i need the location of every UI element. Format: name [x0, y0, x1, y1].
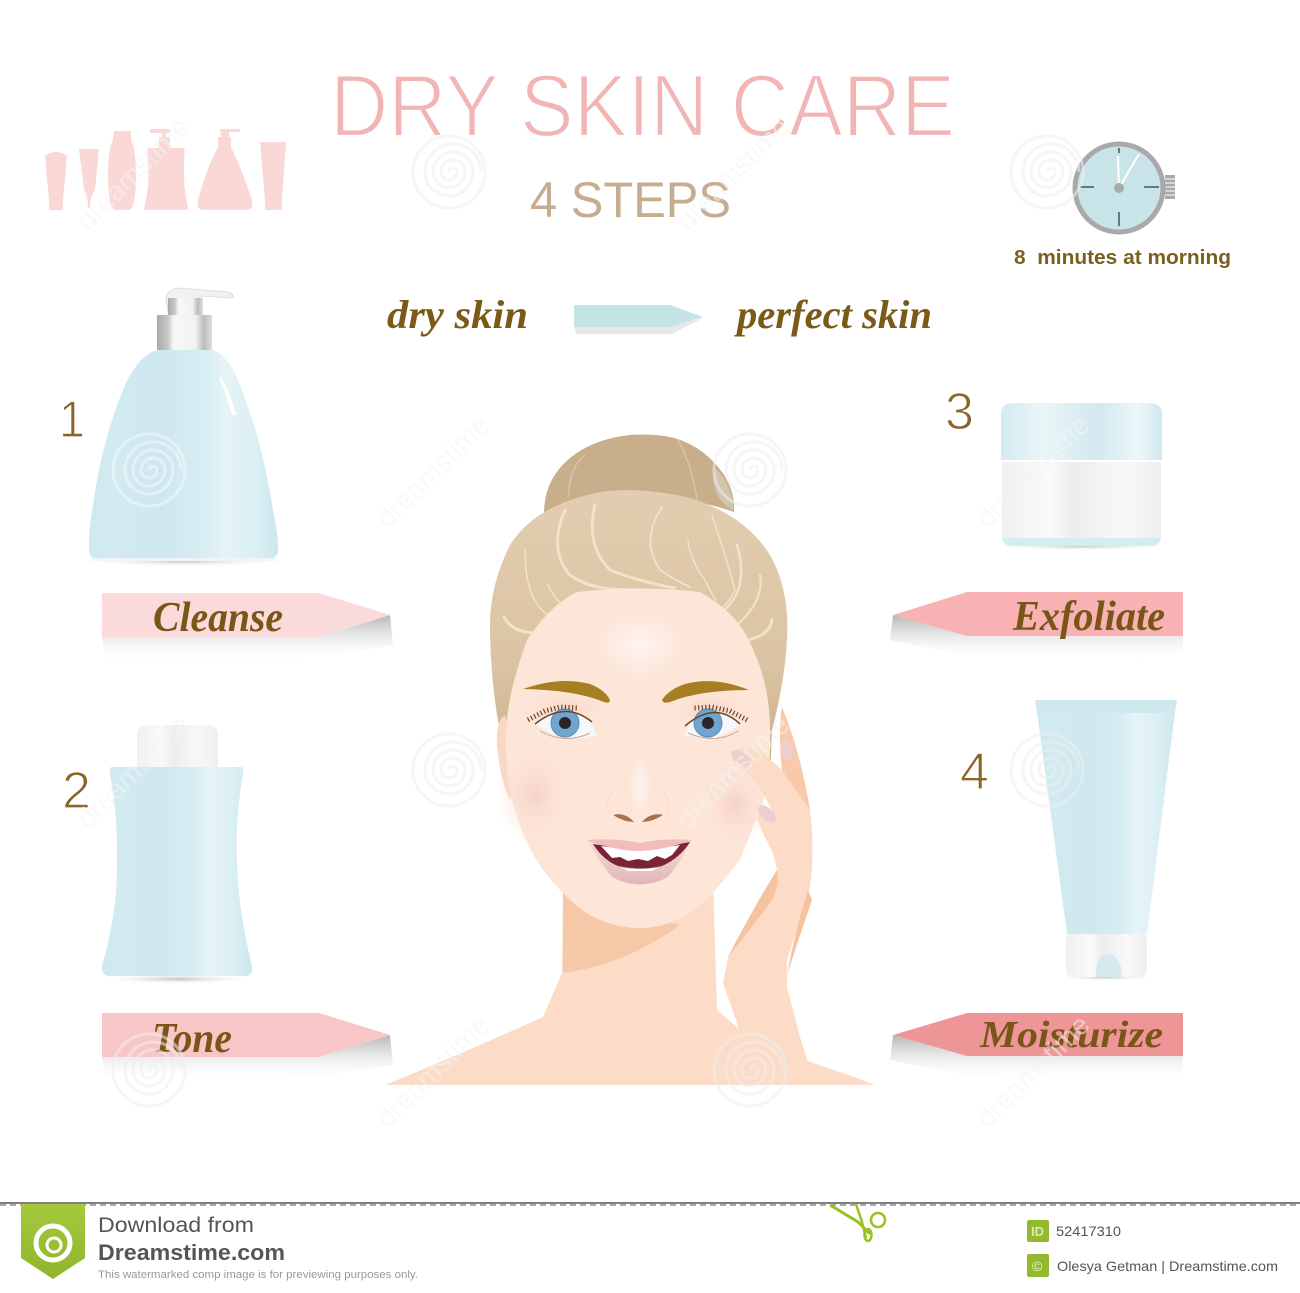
author credit: Olesya Getman | Dreamstime.com	[1057, 1258, 1278, 1274]
from dry skin label: dry skin	[387, 292, 528, 337]
step 1 label arrow: Cleanse: Cleanse	[153, 595, 283, 641]
step 3 label arrow: Exfoliate	[890, 592, 1183, 661]
step 1 number: 1	[59, 391, 85, 449]
icon: scissors	[830, 1204, 885, 1241]
hand	[723, 707, 815, 1085]
illustration: woman's face	[385, 434, 875, 1085]
mouth	[587, 839, 692, 884]
hair main	[490, 490, 787, 780]
step 2 product: toner bottle	[98, 725, 258, 984]
watermark: dreamstime	[370, 409, 496, 534]
title: DRY SKIN CARE	[330, 56, 955, 155]
step 4 label arrow: Moisturize	[890, 1013, 1183, 1081]
eyebrows	[523, 681, 749, 703]
watermark: dreamstime	[370, 1009, 496, 1134]
watermark: dreamstime	[970, 409, 1096, 534]
step 2 label arrow: Tone: Tone	[152, 1016, 232, 1062]
ears	[497, 715, 520, 800]
watermark: dreamstime	[970, 1009, 1096, 1134]
icon: clock	[1075, 144, 1175, 232]
subtitle: 4 steps: 4 STEPS	[530, 172, 731, 228]
footer divider	[0, 1203, 1300, 1205]
ID badge	[1027, 1220, 1049, 1242]
watermark	[70, 111, 1096, 1134]
step 2 label arrow: Tone	[102, 1013, 393, 1082]
right eye	[684, 707, 747, 739]
clock caption: 8 minutes at morning	[1014, 247, 1231, 269]
step 4 product: tube	[1035, 700, 1177, 981]
blush and highlights	[495, 610, 771, 853]
to perfect skin label: perfect skin	[734, 292, 932, 337]
arrow: dry to perfect	[574, 305, 703, 334]
step 3 label arrow: Exfoliate: Exfoliate	[1012, 594, 1165, 640]
watermark: dreamstime	[70, 709, 196, 834]
icon: download badge	[21, 1204, 85, 1279]
nose	[607, 792, 669, 822]
step 3 product: cream jar	[992, 403, 1172, 551]
face	[506, 588, 770, 928]
image id: 52417310	[1056, 1223, 1121, 1239]
watermark: dreamstime	[670, 709, 796, 834]
step 3 number: 3	[945, 383, 974, 441]
ID badge: ID	[1031, 1224, 1044, 1239]
step 1 label arrow: Cleanse	[102, 593, 393, 662]
left eye	[528, 707, 597, 739]
step 4 label arrow: Moisturize: Moisturize	[979, 1014, 1163, 1056]
neck shadow	[563, 885, 680, 973]
icon row: product silhouettes	[45, 129, 286, 210]
watermark: dreamstime	[70, 111, 196, 236]
footer: download from: Download from	[98, 1214, 254, 1237]
copyright badge: ©	[1032, 1258, 1043, 1274]
watermark: dreamstime	[670, 111, 796, 236]
step 2 number: 2	[62, 762, 91, 820]
neck and shoulders	[385, 880, 875, 1085]
footer: disclaimer: This watermarked comp image is for previewing purposes only.	[98, 1269, 418, 1281]
copyright badge	[1027, 1254, 1049, 1277]
hair bun	[544, 434, 734, 512]
footer: Dreamstime.com: Dreamstime.com	[98, 1240, 285, 1265]
step 1 product: pump bottle	[79, 288, 289, 567]
hair highlights	[504, 505, 772, 640]
step 4 number: 4	[960, 743, 989, 801]
